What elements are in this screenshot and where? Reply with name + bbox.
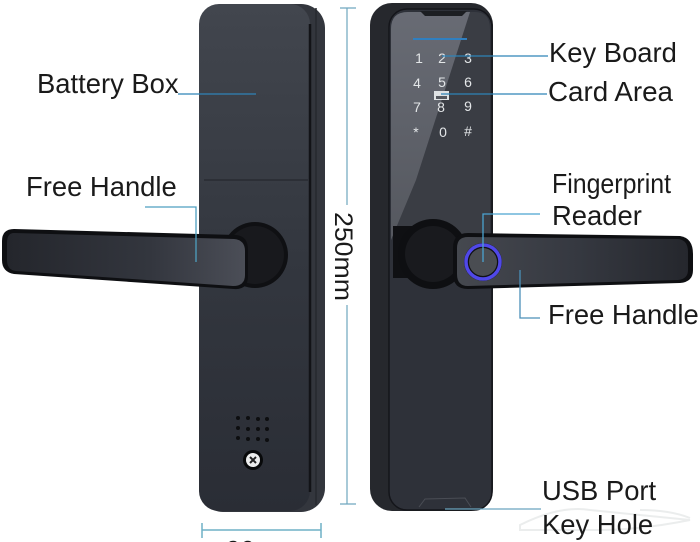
- keypad digits: *: [413, 124, 419, 140]
- glass keypad panel: [391, 11, 490, 240]
- keypad digits: 0: [439, 124, 447, 140]
- card icon: [434, 91, 449, 100]
- label: card area: Card Area: [548, 76, 674, 107]
- keypad digits: 7: [413, 99, 421, 115]
- fingerprint sensor: [464, 243, 502, 281]
- label: free handle left: Free Handle: [26, 171, 177, 202]
- label: fingerprint reader: Fingerprint: [552, 168, 671, 199]
- left lock body: [199, 4, 325, 512]
- watermark: [520, 509, 690, 530]
- label: usb port: USB Port: [542, 475, 657, 506]
- screw: [243, 450, 263, 470]
- keypad digits: 3: [464, 50, 472, 66]
- keypad digits: #: [464, 123, 472, 139]
- keypad digits: 9: [464, 98, 472, 114]
- right lock body: [370, 3, 493, 511]
- speaker holes: [236, 416, 269, 442]
- label: key hole: Key Hole: [542, 509, 653, 540]
- status light bar: [413, 38, 467, 40]
- keypad digits: 6: [464, 74, 472, 90]
- height label: 250mm: [329, 212, 357, 301]
- keypad digits: 2: [438, 50, 446, 66]
- height dimension line: [340, 8, 356, 504]
- right handle: [393, 219, 693, 289]
- label: fingerprint reader: [552, 168, 671, 231]
- keypad digits: [413, 50, 472, 140]
- callout lines: [145, 56, 548, 509]
- left handle: [2, 222, 288, 289]
- keypad digits: 4: [413, 75, 421, 91]
- label: key board: Key Board: [549, 37, 677, 68]
- label: fingerprint reader: Reader: [552, 200, 642, 231]
- label: battery box: Battery Box: [37, 68, 179, 99]
- keypad digits: 1: [415, 50, 423, 66]
- label: free handle right: Free Handle: [548, 299, 699, 330]
- keypad digits: 5: [438, 74, 446, 90]
- width dimension line: [202, 523, 321, 538]
- bottom notch: [419, 498, 471, 507]
- keypad digits: 8: [437, 99, 445, 115]
